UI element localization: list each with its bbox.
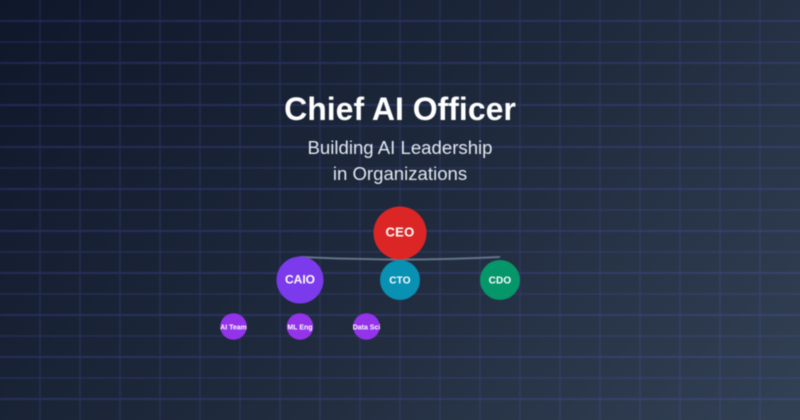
subtitle: in Organizations xyxy=(333,163,467,184)
team node: ML Eng: ML Eng xyxy=(287,324,313,332)
team node: AI Team xyxy=(220,313,247,340)
subtitle: Building AI Leadership xyxy=(307,137,493,158)
org chart node: CEO: CEO xyxy=(385,224,415,240)
org chart node: CAIO xyxy=(276,256,324,304)
org chart node: CTO xyxy=(380,260,420,300)
subtitle xyxy=(307,137,493,184)
title: Chief AI Officer xyxy=(284,91,516,127)
org chart node: CAIO: CAIO xyxy=(285,272,315,286)
team node: ML Eng xyxy=(287,313,313,340)
connector lines xyxy=(300,257,500,260)
org chart node: CDO: CDO xyxy=(489,276,511,286)
org chart node: CEO xyxy=(374,206,426,260)
org chart node: CDO xyxy=(480,260,520,300)
team node: Data Sci: Data Sci xyxy=(353,324,380,332)
team node: Data Sci xyxy=(353,313,380,340)
team node: AI Team: AI Team xyxy=(220,324,247,332)
org chart node: CTO: CTO xyxy=(389,276,411,286)
